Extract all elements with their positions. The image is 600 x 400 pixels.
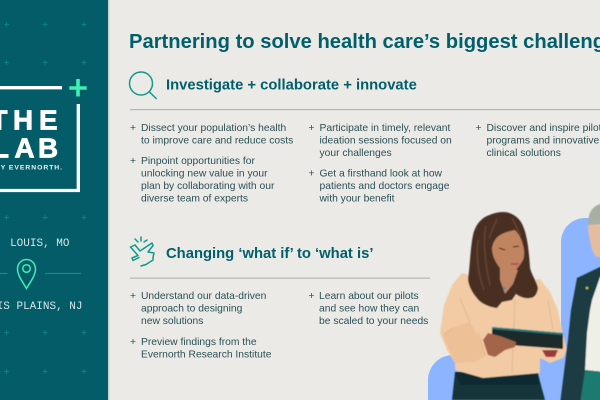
column: investigate 3: clinical solutions [486, 148, 561, 159]
column: investigate 2: with your benefit [318, 194, 395, 204]
column: investigate 1: plan by collaborating with our [141, 181, 275, 192]
divider lines beside pin [0, 272, 81, 274]
photo: two colleagues with tablet [428, 203, 600, 400]
icon: pointing hand [130, 237, 154, 266]
heading: Investigate + collaborate + innovate: Investigate + collaborate + innovate [166, 78, 417, 94]
logo: The Lab by Evernorth [0, 79, 87, 190]
divider [130, 278, 430, 279]
location: St. Louis: LOUIS, MO [10, 238, 70, 250]
column: investigate 1: diverse team of experts [141, 194, 248, 204]
column: investigate 2: + [308, 168, 315, 180]
column: changing 1: + [130, 291, 136, 302]
column: changing 2: and see how they can [319, 304, 419, 314]
column: investigate 2: Get a firsthand look at how [320, 168, 443, 180]
panel: left sidebar [0, 0, 110, 400]
column: investigate 2: + [308, 123, 315, 134]
column: changing 1: approach to designing [141, 304, 243, 314]
column: investigate 2: your challenges [320, 148, 392, 159]
column: changing 2: Learn about our pilots [319, 291, 419, 302]
column: changing 1: Understand our data-driven [141, 291, 267, 302]
column: investigate 2: ideation sessions focused on [320, 136, 452, 146]
icon: magnifying glass [130, 72, 157, 99]
person: woman with tablet [440, 212, 567, 400]
column: investigate 3: programs and innovative [486, 136, 600, 146]
column: investigate 2: patients and doctors engage [320, 181, 450, 192]
column: changing 1: Preview findings from the [141, 337, 257, 348]
column: investigate 3 [476, 123, 600, 159]
column: investigate 1 [130, 123, 293, 204]
column: investigate 1: unlocking new value in your [141, 168, 268, 180]
column: changing 1: Evernorth Research Institute [141, 350, 272, 360]
column: changing 2: + [308, 291, 315, 302]
person: colleague at right [560, 203, 600, 400]
heading: Changing what if to what is: Changing ‘what if’ to ‘what is’ [166, 246, 373, 262]
blue backdrop shapes [428, 218, 600, 400]
column: investigate 1: Dissect your population’s health [141, 123, 286, 134]
icon: map pin [18, 260, 36, 288]
column: changing 1: new solutions [141, 316, 203, 327]
column: changing 2 [308, 291, 428, 327]
column: investigate 1: to improve care and reduce costs [141, 136, 293, 146]
column: investigate 3: + [476, 123, 482, 134]
column: changing 1 [130, 291, 272, 360]
divider [130, 109, 600, 110]
column: investigate 1: + [130, 123, 136, 134]
column: investigate 2: Participate in timely, relevant [320, 123, 451, 134]
column: changing 2: be scaled to your needs [319, 316, 428, 327]
column: investigate 1: Pinpoint opportunities for [141, 156, 255, 167]
column: investigate 1: + [130, 156, 136, 167]
column: changing 1: + [130, 337, 136, 348]
column: investigate 2 [308, 123, 452, 204]
column: investigate 3: Discover and inspire pilot [486, 123, 600, 134]
